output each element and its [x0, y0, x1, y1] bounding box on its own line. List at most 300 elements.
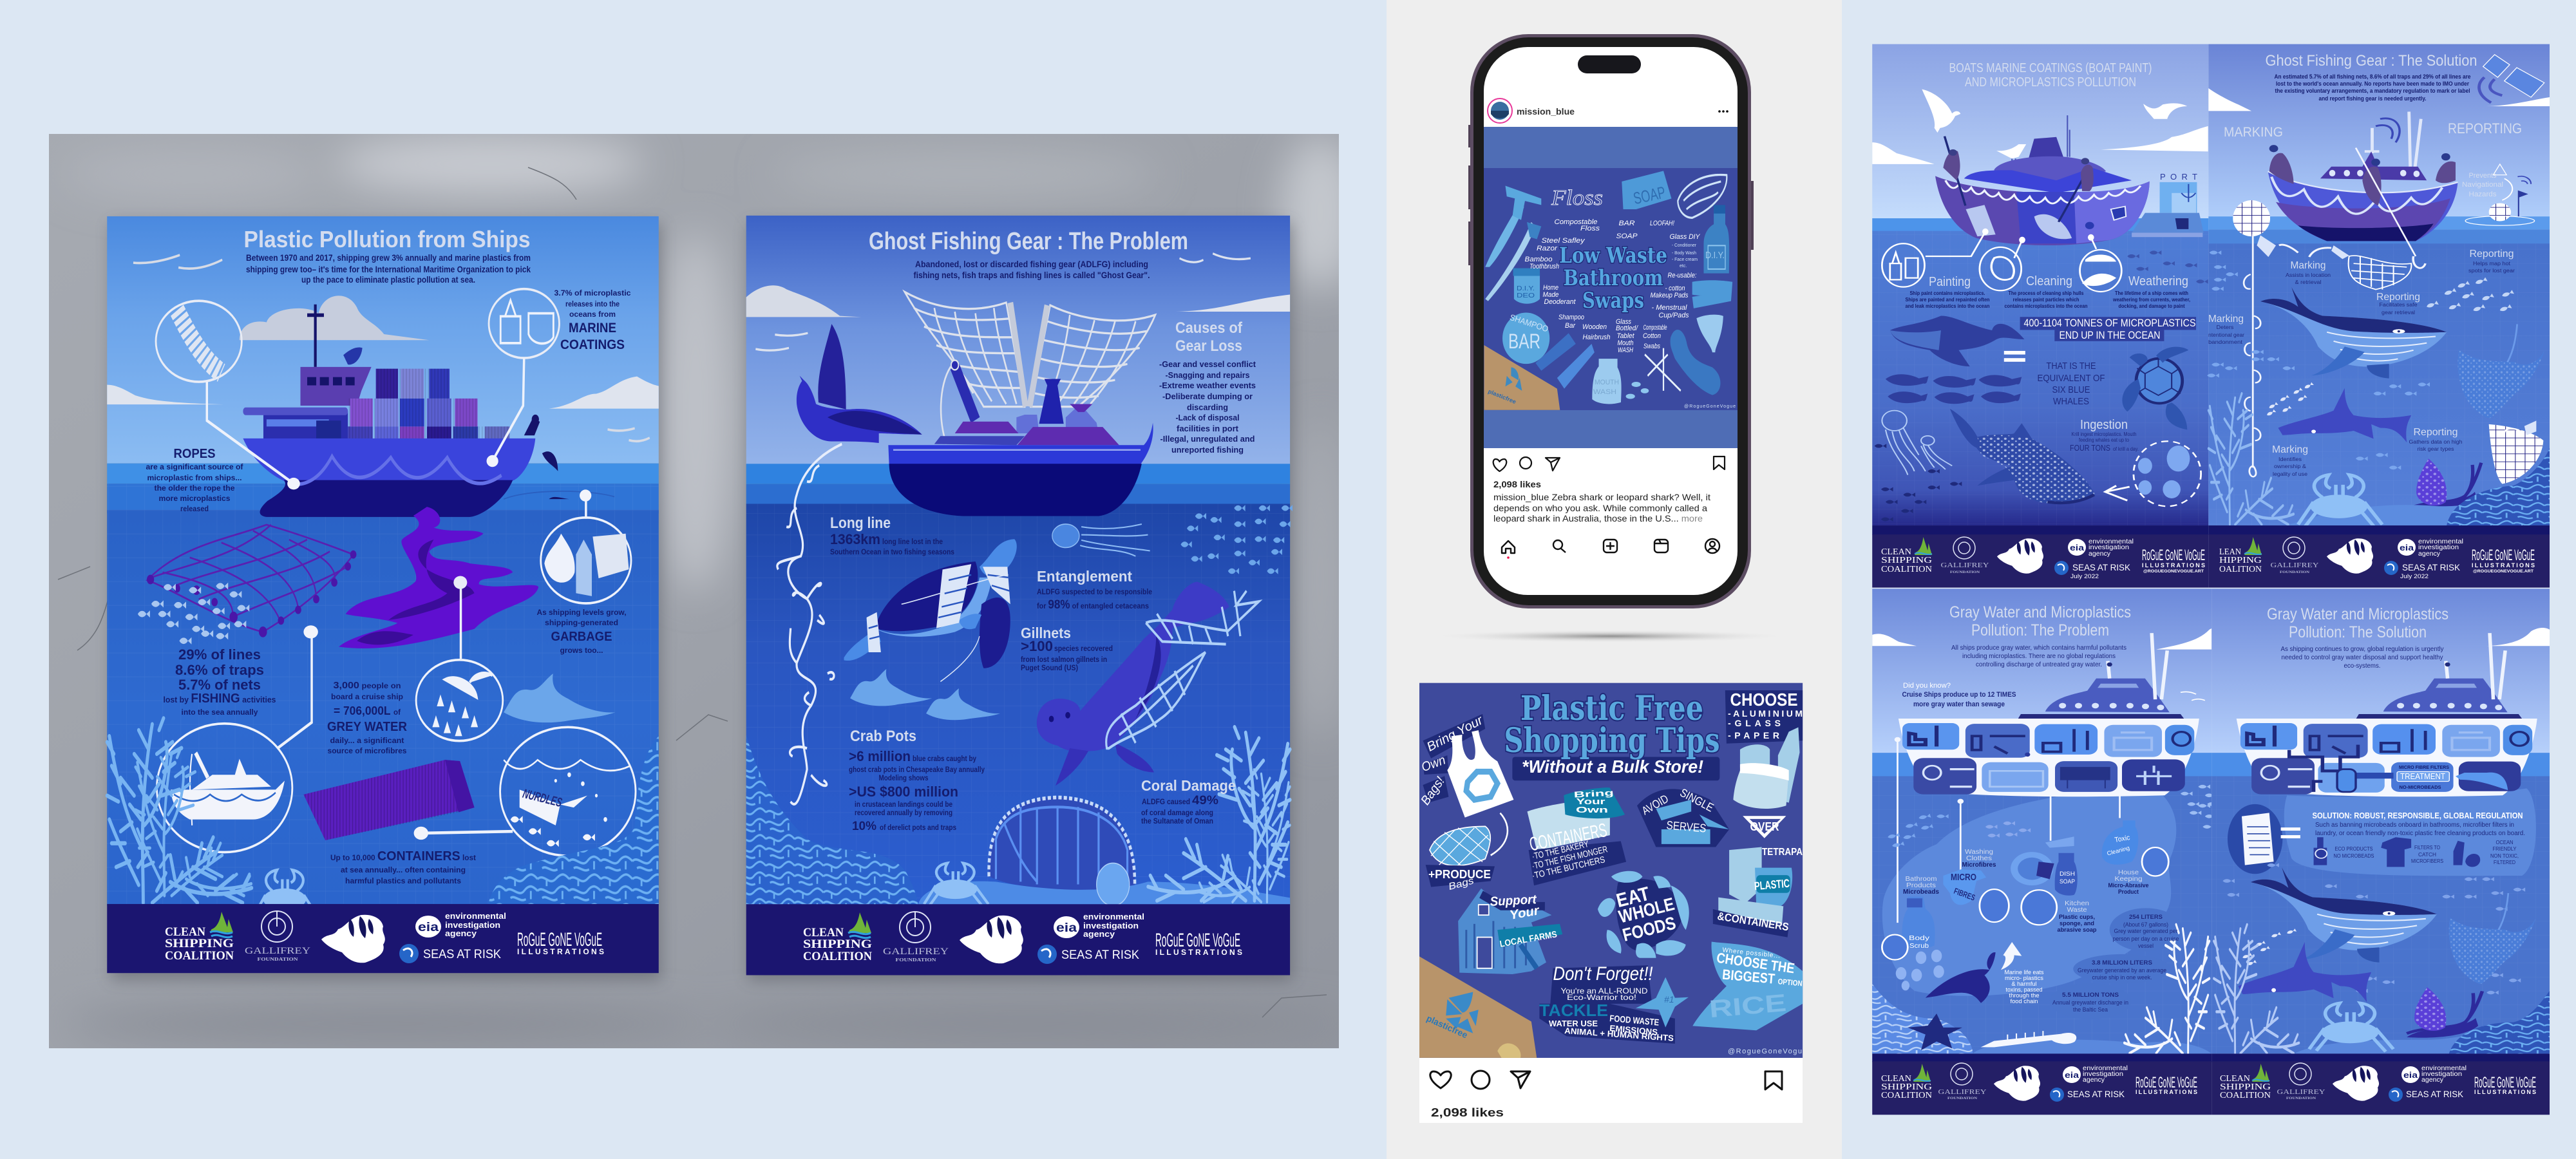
solution bubble: NO MICROBEADS [2334, 853, 2374, 859]
post image: Low Waste Bathroom Swaps: WASH [1593, 388, 1616, 396]
intro text: up the pace to eliminate plastic pollution at sea. [301, 274, 475, 285]
post handwritten tips: ·TO THE FISH MONGER [1531, 843, 1609, 871]
post image: Low Waste Bathroom Swaps: Floss [1551, 186, 1603, 210]
post image: Low Waste Bathroom Swaps: Made [1543, 291, 1558, 299]
post handwritten tips: FOOD WASTE [1609, 1013, 1660, 1028]
solution bubble: NON TOXIC, [2490, 853, 2519, 859]
post handwritten tips: EMISSIONS [1609, 1023, 1658, 1037]
footer logos: GALLIFREY [2271, 561, 2319, 569]
notification dot [1507, 556, 1510, 559]
item labels: sponge, and [2060, 920, 2094, 927]
post handwritten tips: TETRAPA [1762, 847, 1803, 858]
post image: Low Waste Bathroom Swaps: Razor [1537, 245, 1558, 252]
title: Ghost Fishing Gear : The Problem [869, 228, 1188, 255]
panel: poster Ghost Fishing Gear The Solution [2207, 44, 2550, 588]
post handwritten tips: -PAPER [1728, 730, 1779, 740]
item labels: Microbeads [1903, 889, 1939, 896]
treatment labels [2399, 766, 2449, 790]
footer logos: SEAS AT RISK [2067, 1089, 2125, 1099]
post image: Low Waste Bathroom Swaps: etc. [1680, 264, 1687, 269]
footer logos: GALLIFREY [883, 947, 949, 957]
label: painting: Ship paint contains microplastics. [1910, 290, 1985, 296]
footer logos: ILLUSTRATIONS [2472, 562, 2535, 569]
post image: Low Waste Bathroom Swaps: Toothbrush [1530, 263, 1559, 270]
post image: Low Waste Bathroom Swaps: Glass DIY [1669, 233, 1700, 241]
labels on products [1909, 834, 2131, 950]
footer logos: agency [2418, 551, 2440, 558]
callout: ropes: more microplastics [158, 494, 231, 503]
callout: marine coatings [554, 288, 631, 352]
post image: Low Waste Bathroom Swaps: - cotton [1665, 285, 1685, 292]
info bubbles: 5.5 MILLION TONS [2062, 992, 2119, 998]
footer logos: CLEAN [2220, 1074, 2250, 1084]
intro text: needed to control gray water disposal and support healthy [2281, 654, 2443, 661]
icon: nurdles box: NURDLES [521, 787, 564, 810]
statistic: fishing gear lost: lost by FISHING activities [164, 692, 276, 706]
phone screen [1484, 47, 1738, 595]
statistic: fishing gear lost: 29% of lines [178, 646, 261, 663]
footer logos: ILLUSTRATIONS [2142, 562, 2205, 569]
callout: gillnets: from lost salmon gillnets in [1021, 655, 1107, 664]
callout: containers: Up to 10,000 CONTAINERS lost [330, 849, 476, 863]
heading [1949, 61, 2152, 90]
callout: ingestion: feeding whales eat up to [2079, 437, 2129, 443]
footer logos: FOUNDATION [1950, 571, 1980, 574]
post handwritten tips: Where possible... [1722, 947, 1781, 960]
solution bubble: ECO PRODUCTS [2335, 846, 2372, 852]
callouts: marking and reporting labels: Marking [2272, 444, 2308, 455]
heading: BOATS MARINE COATINGS (BOAT PAINT) [1949, 61, 2152, 75]
footer logos [1881, 1063, 2197, 1102]
footer logos: @ROGUEGONEVOGUE.ART [2473, 570, 2533, 574]
heading: Pollution: The Problem [1971, 621, 2109, 639]
callout: garbage: GARBAGE [551, 630, 612, 644]
post image: Low Waste Bathroom Swaps: Deoderant [1544, 298, 1576, 306]
label: PORT: PORT [2160, 172, 2197, 182]
post image: Low Waste Bathroom Swaps: D.I.Y. [1705, 250, 1725, 261]
labels on products: SOAP [2060, 878, 2075, 885]
post caption: 2,098 likes [1493, 479, 1541, 489]
treatment labels: TREATMENT [2400, 771, 2445, 781]
heading: Gray Water and Microplastics [1949, 603, 2131, 621]
did you know callout [1902, 682, 2016, 708]
statistic: six blue whales: WHALES [2053, 396, 2089, 407]
label: cleaning: releases paint particles which [2013, 297, 2079, 303]
labels on products: MICRO [1951, 872, 1976, 883]
illustration: fishing ship, wildlife, ghost gear [746, 216, 1293, 975]
callout: garbage: grows too... [560, 646, 603, 655]
info bubbles [2052, 914, 2179, 1013]
list: causes of gear loss: facilities in port [1177, 424, 1239, 433]
illustration: ship scene and ocean [107, 216, 659, 973]
post image: Low Waste Bathroom Swaps: LOOFAH! [1650, 220, 1674, 227]
item labels: Clothes [1966, 855, 1992, 862]
list: causes of gear loss: -Snagging and repairs [1166, 370, 1249, 380]
solution bubble: FILTERED [2494, 860, 2515, 865]
callout: ingestion: Krill ingest microplastics. Mouth [2071, 431, 2137, 437]
post headline: *Without a Bulk Store! [1522, 757, 1703, 777]
callout: grey water: GREY WATER [327, 720, 408, 734]
footer logos: OALITION [2219, 565, 2262, 574]
list: causes of gear loss: -Gear and vessel conflict [1159, 359, 1256, 369]
callouts: marking and reporting labels: Marking [2208, 314, 2244, 325]
footer logos [803, 912, 1242, 964]
post action icons [1430, 1071, 1782, 1089]
post image: Low Waste Bathroom Swaps: - Conditioner [1672, 243, 1697, 248]
footer logos: FOUNDATION [1947, 1097, 1978, 1100]
label: painting [1905, 275, 1990, 309]
callouts: marking and reporting labels: Reporting [2376, 292, 2420, 303]
heading: AND MICROPLASTICS POLLUTION [1965, 75, 2136, 90]
footer logos: SHIPPING [803, 938, 872, 951]
callout: navigational hazards: Navigational [2462, 181, 2503, 189]
food chain note [2004, 969, 2044, 1004]
did you know callout: Did you know? [1903, 682, 1951, 690]
post image: Low Waste Bathroom Swaps: BAR [1619, 220, 1635, 227]
label: marking: MARKING [2224, 125, 2283, 140]
footer logos: environmental [1083, 912, 1144, 921]
statistic: tonnes of microplastics: END UP IN THE OCEAN [2060, 329, 2160, 341]
callout: grey water: board a cruise ship [331, 692, 403, 701]
post handwritten tips: Bring Your [1425, 713, 1486, 755]
intro text: and report fishing gear is needed urgently. [2318, 95, 2427, 102]
callout: long line: Long line [830, 514, 891, 532]
label: weathering: Weathering [2128, 274, 2188, 288]
intro text: fishing nets, fish traps and fishing lines is called "Ghost Gear". [913, 270, 1150, 280]
footer logos: @ROGUEGONEVOGUE.ART [2143, 570, 2204, 574]
statistic: fishing gear lost: into the sea annually [182, 708, 258, 717]
post handwritten tips: PLASTIC [1754, 877, 1790, 892]
item labels: Kitchen [2065, 900, 2089, 907]
footer logos: July 2022 [2070, 573, 2099, 580]
panel: poster Boats Marine Coatings [1872, 44, 2208, 588]
post handwritten tips: OVER [1750, 820, 1779, 833]
callout: ingestion: Ingestion [2080, 418, 2128, 432]
solution bubble: laundry, or ocean friendly non-toxic plastic free cleaning products on board. [2315, 830, 2525, 837]
footer logos: ILLUSTRATIONS [1155, 948, 1242, 957]
post image: Low Waste Bathroom Swaps: D.I.Y. [1517, 285, 1535, 292]
item labels: Microfibres [1962, 862, 1996, 869]
callout: gillnets: species recovered [1054, 644, 1113, 653]
post image: Low Waste Bathroom Swaps: Bottled/ [1616, 325, 1638, 332]
info bubbles: Greywater generated by an average [2078, 967, 2166, 974]
post image: Low Waste Bathroom Swaps: Hairbrush [1583, 334, 1610, 341]
intro text [246, 252, 531, 285]
food chain note: Marine life eats [2004, 969, 2044, 975]
post image: Low Waste Bathroom Swaps: Bar [1565, 322, 1576, 330]
treatment labels: MICRO FIBRE FILTERS [2399, 766, 2449, 770]
callout: long line: Southern Ocean in two fishing seasons [830, 547, 954, 556]
callout: crab pots: blue crabs caught by [913, 754, 976, 763]
illustration: cruise ship cross-section and sea life [1872, 589, 2274, 1115]
callout: crab pots: in crustacean landings could be [855, 800, 952, 809]
heading: Pollution: The Solution [2289, 623, 2427, 641]
label: weathering [2112, 274, 2190, 309]
footer logos: agency [2421, 1077, 2443, 1084]
footer logos: LEAN [2219, 547, 2241, 557]
post header: mission_blue [1517, 106, 1575, 117]
footer logos: SHIPPING [165, 937, 234, 950]
callout: gillnets [1021, 625, 1113, 672]
item labels: Product [2118, 889, 2139, 895]
panel: poster Gray Water The Problem [1872, 589, 2274, 1115]
callout: ropes: microplastic from ships... [147, 473, 242, 482]
callout: ingestion [2070, 418, 2139, 453]
panel: centre grey column [1387, 0, 1842, 1159]
post image: Low Waste Bathroom Swaps: Glass [1616, 318, 1631, 326]
footer logos: FOUNDATION [2286, 1097, 2316, 1100]
intro text: eco-systems. [2344, 663, 2380, 670]
intro text: lost to the world's ocean annually. No reports have been made to IMO under [2276, 80, 2469, 87]
label: cleaning [2004, 274, 2088, 309]
footer logos: SEAS AT RISK [1061, 948, 1139, 962]
label: weathering: The lifetime of a ship comes with [2115, 290, 2188, 296]
post image: Low Waste Bathroom Swaps: BAR [1508, 330, 1540, 353]
post handwritten tips: Own [1419, 753, 1448, 775]
post image: Low Waste Bathroom Swaps: Mouth [1618, 339, 1633, 347]
info bubbles: (About 67 gallons) [2123, 921, 2168, 928]
footer logos: SEAS AT RISK [2072, 562, 2131, 572]
callout: ropes: released [180, 504, 209, 513]
callout: marine coatings: MARINE [569, 321, 616, 335]
post image: Low Waste Bathroom Swaps: Bamboo [1525, 256, 1552, 263]
post image: Low Waste Bathroom Swaps: Steel Safley [1542, 237, 1586, 245]
post handwritten tips: BIGGEST OPTION [1721, 966, 1803, 989]
callout: crab pots: of derelict pots and traps [880, 823, 956, 832]
item labels: House [2118, 869, 2139, 876]
callouts: marking and reporting labels: Reporting [2414, 427, 2458, 438]
list: causes of gear loss: -Lack of disposal [1176, 413, 1239, 422]
post handwritten tips: EAT [1614, 883, 1652, 912]
callout: containers [330, 849, 476, 885]
post handwritten tips: -ALUMINIUM [1728, 708, 1803, 719]
post image: Low Waste Bathroom Swaps: - Body Wash [1672, 251, 1696, 256]
post handwritten tips: CONTAINERS [1528, 820, 1609, 856]
info bubbles: 3.8 MILLION LITERS [2092, 959, 2152, 966]
callout: ropes: are a significant source of [146, 462, 244, 471]
intro text [913, 259, 1150, 280]
statistic: tonnes of microplastics: 400-1104 TONNES OF MICROPLASTICS [2023, 317, 2196, 329]
phone side buttons [1468, 125, 1754, 265]
info bubbles: Grey water generated per [2114, 928, 2178, 934]
post image: Low Waste Bathroom Swaps: Home [1543, 284, 1558, 292]
list: causes of gear loss: Causes of [1175, 319, 1243, 337]
callouts: marking and reporting labels: & retrieval [2295, 279, 2322, 285]
solution bubble: MICROFIBERS [2411, 858, 2443, 864]
post headline: Shopping Tips [1504, 721, 1719, 760]
statistic: six blue whales: SIX BLUE [2052, 384, 2090, 395]
info bubbles: vessel [2138, 943, 2154, 949]
footer logos: COALITION [165, 949, 234, 963]
footer logos: GALLIFREY [245, 946, 310, 956]
callouts: marking and reporting labels: ownership & [2274, 464, 2307, 469]
callout: marine coatings: releases into the [565, 299, 620, 308]
list: causes of gear loss: unreported fishing [1171, 445, 1244, 455]
callout: containers: harmful plastics and pollutants [345, 876, 461, 885]
heading: Gray Water and Microplastics [2267, 605, 2448, 623]
callout: crab pots: recovered annually by removing [855, 808, 952, 817]
post handwritten tips: ·TO THE BAKERY [1531, 838, 1590, 862]
post image: Low Waste Bathroom Swaps: Makeup Pads [1650, 292, 1689, 299]
footer logos [165, 911, 604, 963]
illustration: marking and reporting scene [2207, 44, 2550, 588]
item labels: Products [1906, 882, 1936, 889]
callout: ingestion: FOUR TONS [2070, 443, 2110, 453]
footer logos: FOUNDATION [895, 957, 936, 963]
intro text: shipping grew too– it's time for the International Maritime Organization to pick [246, 264, 531, 274]
footer logos: eia [2070, 543, 2085, 552]
callout: entanglement: Entanglement [1037, 568, 1132, 585]
callout: long line: 1363km [830, 531, 880, 547]
post handwritten tips: &CONTAINERS [1716, 910, 1790, 933]
callout: crab pots: Modeling shows [878, 773, 929, 782]
post image: Low Waste Bathroom Swaps: WASH [1618, 346, 1633, 354]
footer logos: investigation [1083, 921, 1139, 930]
footer logos: eia [2403, 1070, 2418, 1080]
post image: Low Waste Bathroom Swaps: Re-usable: [1668, 272, 1696, 279]
callout: crab pots: 10% [852, 820, 876, 833]
footer logos: COALITION [803, 950, 872, 963]
intro text [1951, 645, 2126, 668]
label: reporting: REPORTING [2448, 120, 2522, 137]
post image: Low Waste Bathroom Swaps: Wooden [1582, 323, 1607, 331]
post handwritten tips: plasticfree [1425, 1013, 1470, 1040]
footer logos: agency [2088, 551, 2110, 558]
phone shadow [1430, 630, 1790, 643]
labels on products: Body [1909, 935, 1929, 942]
post caption: mission_blue Zebra shark or leopard shark? Well, it [1493, 492, 1710, 502]
statistic: fishing gear lost: 5.7% of nets [178, 677, 261, 693]
callout: grey water: daily... a significant [330, 736, 404, 745]
intro text: the existing voluntary arrangements, a mandatory regulation to mark or label [2275, 88, 2470, 94]
info bubbles: person per day on a cruise [2112, 936, 2179, 942]
title: Plastic Pollution from Ships [243, 226, 531, 252]
item labels: Micro-Abrasive [2108, 882, 2148, 889]
solution bubble: FILTERS TO [2414, 845, 2440, 851]
footer logos: HIPPING [2219, 556, 2262, 565]
panel: poster Ghost Fishing Gear The Problem: RoGuE GoNE VoGuE [1155, 930, 1240, 951]
treatment labels: NO-MICROBEADS [2400, 786, 2441, 790]
label: painting: Painting [1929, 275, 1971, 289]
post handwritten tips: WATER USE [1549, 1019, 1598, 1028]
label: weathering: weathering from currents, weather, [2112, 297, 2190, 303]
info bubbles: 254 LITERS [2129, 914, 2163, 920]
footer logos: GALLIFREY [1941, 561, 1989, 569]
post handwritten tips: Your [1508, 903, 1541, 923]
post image: Low Waste Bathroom Swaps: Bathroom [1564, 265, 1663, 291]
post image: Low Waste Bathroom Swaps: SOAP [1632, 182, 1667, 208]
callout: marine coatings: COATINGS [560, 337, 625, 352]
footer logos: agency [1083, 929, 1115, 939]
post image: Low Waste Bathroom Swaps: - Menstrual [1651, 304, 1687, 312]
callout: grey water [327, 680, 408, 755]
item labels: Bathroom [1905, 876, 1937, 883]
list: causes of gear loss [1159, 319, 1256, 455]
footer logos: CLEAN [1881, 547, 1911, 557]
post handwritten tips: -GLASS [1728, 718, 1781, 728]
intro text: An estimated 5.7% of all fishing nets, 8.6% of all traps and 29% of all lines are [2275, 73, 2470, 80]
post image: Low Waste Bathroom Swaps: Compostable [1643, 324, 1667, 332]
footer logos: CLEAN [1881, 1074, 1911, 1084]
list: causes of gear loss: -Illegal, unregulated and [1160, 434, 1255, 444]
callout: gillnets: Gillnets [1021, 625, 1071, 641]
footer logos: investigation [2083, 1071, 2123, 1078]
solution bubble: CATCH [2418, 852, 2436, 858]
footer logos: SEAS AT RISK [2402, 562, 2461, 572]
footer logos: SHIPPING [2220, 1082, 2271, 1092]
callouts: marking and reporting labels: Facilitates safe [2379, 302, 2418, 308]
did you know callout: Cruise Ships produce up to 12 TIMES [1902, 691, 2016, 699]
item labels [1903, 849, 2148, 933]
post action icons [1493, 457, 1725, 471]
labels on products: FIBRES [1953, 886, 1976, 903]
callouts: marking and reporting labels: ntentional gear [2208, 332, 2244, 338]
post handwritten tips: Don't Forget!! [1553, 963, 1653, 985]
callout: long line [830, 514, 954, 556]
solution bubble: FRIENDLY [2492, 846, 2517, 852]
footer logos: environmental [2083, 1065, 2128, 1072]
post handwritten tips: ANIMAL + HUMAN RIGHTS [1564, 1026, 1674, 1043]
post handwritten tips: Bags [1447, 875, 1475, 892]
statistic: six blue whales: THAT IS THE [2047, 361, 2096, 372]
food chain note: through the [2009, 992, 2039, 999]
phone body [1470, 34, 1751, 608]
callouts: marking and reporting labels: spots for lost gear [2468, 268, 2515, 274]
item labels: Washing [1965, 849, 1993, 856]
panel: concrete wall mockup [49, 134, 1359, 1048]
post handwritten tips: CHOOSE THE [1716, 950, 1795, 976]
post handwritten tips: SINGLE [1678, 786, 1716, 815]
footer logos: eia [2065, 1070, 2079, 1080]
footer logos: agency [445, 928, 477, 938]
item labels: Keeping [2115, 876, 2142, 883]
callout: ropes [146, 447, 244, 513]
label: cleaning: Cleaning [2026, 274, 2072, 288]
footer logos: environmental [445, 911, 506, 921]
callout: garbage: shipping-generated [545, 618, 618, 627]
callout: crab pots [849, 728, 985, 833]
list: causes of gear loss: -Deliberate dumping or [1162, 391, 1253, 401]
callout: long line: long line lost in the [882, 537, 943, 546]
callout: entanglement: for 98% of entangled cetaceans [1037, 598, 1149, 612]
intro text: controlling discharge of untreated gray water. [1976, 661, 2102, 668]
post caption [1493, 479, 1710, 523]
post image: Low Waste Bathroom Swaps: plasticfree [1487, 388, 1517, 405]
post caption: depends on who you ask. While commonly called a [1493, 503, 1707, 513]
callouts: marking and reporting labels: legality of use [2273, 471, 2308, 477]
callout: entanglement: ALDFG suspected to be responsible [1037, 587, 1152, 596]
footer logos: SEAS AT RISK [2406, 1089, 2464, 1099]
heading: Ghost Fishing Gear : The Solution [2266, 52, 2477, 70]
item labels: Waste [2067, 907, 2087, 914]
post handwritten tips: @RogueGoneVogu [1728, 1048, 1802, 1055]
solution bubble: OCEAN [2496, 840, 2514, 845]
footer logos: GALLIFREY [2277, 1088, 2325, 1096]
callout: crab pots: Crab Pots [850, 728, 916, 745]
callout: ropes: the older the rope the [155, 484, 235, 493]
list: causes of gear loss: discarding [1187, 402, 1228, 412]
list: causes of gear loss: Gear Loss [1175, 337, 1242, 355]
callouts: marking and reporting labels: Assists in location [2286, 272, 2331, 278]
post image: Low Waste Bathroom Swaps: Floss [1580, 225, 1600, 232]
callout: gillnets: >100 [1021, 638, 1053, 654]
footer logos: ILLUSTRATIONS [517, 947, 604, 956]
callout: grey water: source of microfibres [327, 746, 407, 755]
footer logos: eia [1056, 921, 1077, 935]
label: weathering: docking, and damage to paint [2119, 303, 2185, 309]
callout: crab pots: >6 million [849, 748, 911, 764]
callout: crab pots: ghost crab pots in Chesapeake Bay annually [849, 765, 985, 774]
